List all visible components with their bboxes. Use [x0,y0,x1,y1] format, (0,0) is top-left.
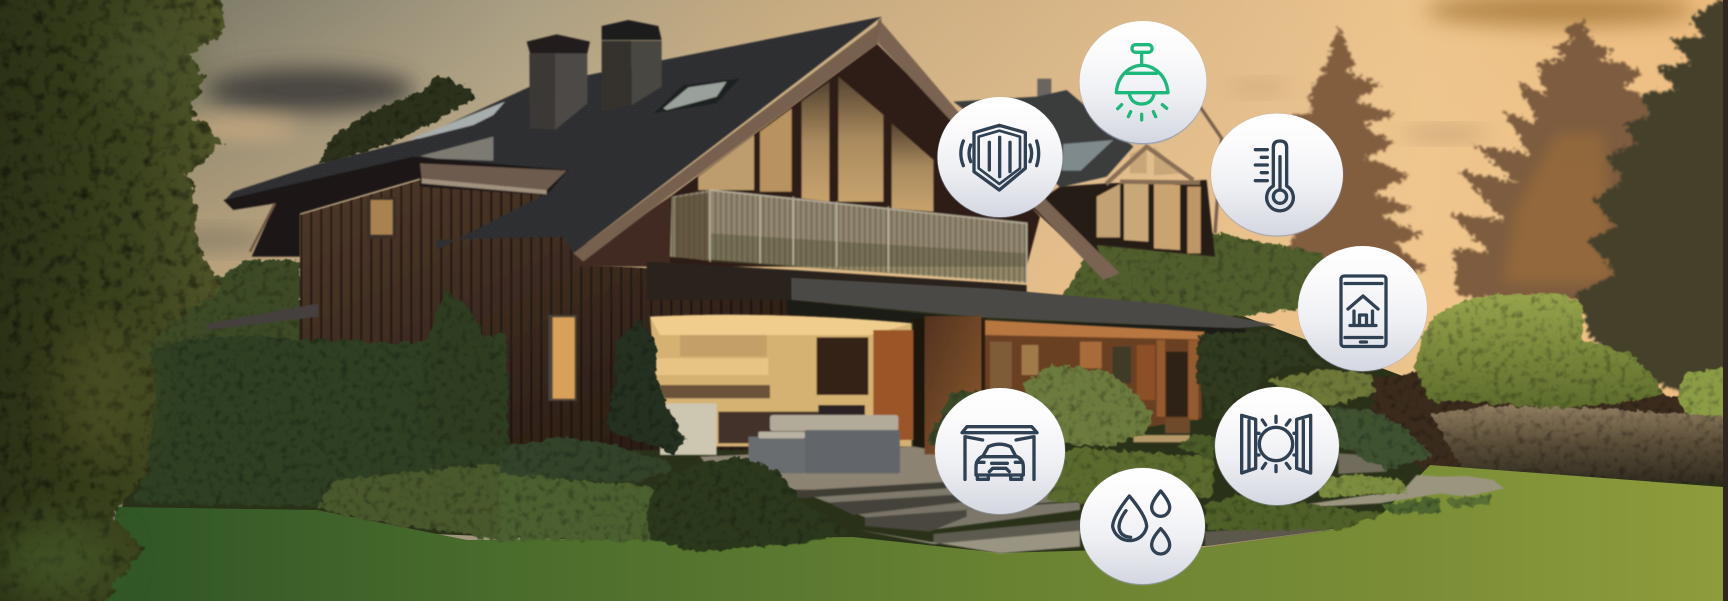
pine: tall centre [1450,20,1663,300]
balcony floor [647,262,1027,300]
pine: dark right [1577,0,1728,400]
icon: ceiling lamp [1116,45,1168,120]
icon: garage and car [962,427,1037,479]
eave underside [223,157,568,257]
window panes [698,135,754,190]
shingle slope [223,17,882,253]
main walls [300,180,830,450]
tree behind roof and tree by wall [130,75,473,353]
chimney 1 [529,53,555,130]
wooden wall section [913,318,925,453]
trees right of lawn [1373,293,1727,485]
lower roof [787,278,1276,335]
garden shrubs [133,290,1490,552]
icon: thermometer [1255,141,1293,211]
gable interior [647,43,1040,267]
bushes behind back wing [1063,233,1330,320]
window on wall [548,315,577,401]
button: smart home phone [1298,246,1427,372]
icon: shutters [1242,415,1311,473]
rake fascia [573,17,882,262]
gable with glazing and balcony [573,18,1120,300]
icon: droplets [1113,491,1170,554]
steps [797,481,967,503]
icon: phone with house [1341,276,1386,346]
button: security shield [938,97,1062,218]
window upper wall [367,197,396,239]
shrubs on the left [133,290,510,542]
button: thermostat [1211,114,1343,236]
button: lamp [1080,21,1206,144]
sofa [770,415,898,431]
small lean-to roof on the left [207,303,318,330]
shrubs centre [500,320,980,552]
background foliage [130,75,1727,485]
chimney 2 [602,41,632,112]
back wing of the house [953,79,1222,277]
button: window shutters and sun [1215,387,1339,506]
glass balustrade [670,190,1027,283]
pine: small [1277,27,1428,277]
terrace room and furniture [548,315,1080,553]
lawn [100,465,1728,601]
button: car garage [935,388,1065,514]
right terrace with doors [925,316,1504,547]
shrubs right [1023,330,1490,530]
room [650,315,912,447]
paths and side steps [1308,475,1440,507]
right edge strip [1723,0,1728,601]
terrace floor [700,447,953,490]
walkway [858,530,1080,553]
button: water drops [1080,468,1205,585]
pine trees at right [1277,0,1728,400]
pine: sunlit trunk glow [1503,133,1613,283]
large tree on the left [0,0,228,601]
skylights [408,102,505,140]
right rake [878,18,1120,280]
icon: shield [961,125,1039,190]
wall under left rake [573,197,670,267]
dark ground base under the garden [120,300,1723,560]
main roof [223,17,882,262]
